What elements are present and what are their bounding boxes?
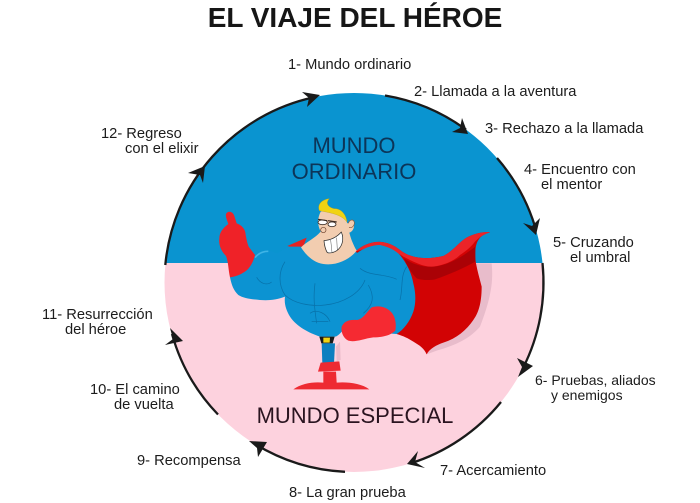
arrow: 9	[249, 441, 267, 457]
heading: mundo ordinario	[292, 133, 416, 184]
label 5: 5- Cruzando	[553, 235, 634, 251]
cape highlight	[355, 232, 490, 267]
teeth	[324, 232, 343, 253]
collar	[287, 238, 307, 250]
eyes	[318, 219, 337, 227]
fist	[341, 306, 396, 341]
label 9: 9- Recompensa	[137, 453, 242, 469]
step labels	[42, 57, 656, 501]
label 1: 1- Mundo ordinario	[288, 57, 411, 73]
label 11: 11- Resurrección	[42, 307, 153, 323]
nose	[321, 227, 326, 233]
ear	[348, 220, 354, 228]
arrow: 2	[452, 118, 468, 134]
cape	[355, 232, 490, 354]
shoulder highlight	[255, 251, 268, 258]
arrow: 11	[165, 328, 183, 345]
arrow: 7	[407, 451, 425, 468]
arrowheads	[165, 92, 540, 468]
label 6: 6- Pruebas, aliados	[535, 372, 656, 388]
label 12: con el elixir	[125, 141, 199, 157]
arrow: 12	[188, 166, 205, 183]
label 4: el mentor	[541, 177, 602, 193]
panel: mundo especial half	[165, 263, 544, 472]
muscle lines	[257, 262, 407, 323]
hair	[319, 199, 347, 222]
cape fold	[404, 247, 475, 280]
label 10: de vuelta	[114, 397, 174, 413]
heading: mundo ordinario: ORDINARIO	[292, 159, 416, 184]
leg	[322, 343, 335, 363]
neck and chin	[301, 210, 357, 264]
body	[230, 245, 415, 337]
label 4: 4- Encuentro con	[524, 162, 636, 178]
belt	[319, 337, 335, 343]
heading: mundo ordinario: MUNDO	[312, 133, 396, 158]
panel: circle worlds	[165, 93, 544, 472]
arrow: 3	[523, 218, 540, 235]
label 6: y enemigos	[551, 387, 623, 403]
label 7: 7- Acercamiento	[440, 463, 546, 479]
tooth lines	[331, 238, 337, 252]
label 11: del héroe	[65, 322, 126, 338]
arrow: 1	[302, 92, 320, 107]
label 8: 8- La gran prueba	[289, 485, 407, 501]
leg shadow	[336, 342, 341, 362]
glove raised	[219, 212, 255, 277]
illustration: superhero	[219, 199, 492, 389]
journey ring arcs	[165, 96, 543, 472]
label 2: 2- Llamada a la aventura	[414, 84, 577, 100]
label 3: 3- Rechazo a la llamada	[485, 121, 644, 137]
label 5: el umbral	[570, 250, 630, 266]
buckle	[323, 338, 330, 343]
cape shadow	[427, 263, 492, 354]
heading: mundo especial: MUNDO ESPECIAL	[257, 403, 453, 428]
label 10: 10- El camino	[90, 382, 180, 398]
label 12: 12- Regreso	[101, 126, 182, 142]
panel: mundo ordinario half	[166, 93, 542, 263]
boot	[293, 361, 369, 389]
arrow: 6	[517, 358, 533, 377]
title: EL VIAJE DEL HÉROE	[208, 2, 502, 33]
